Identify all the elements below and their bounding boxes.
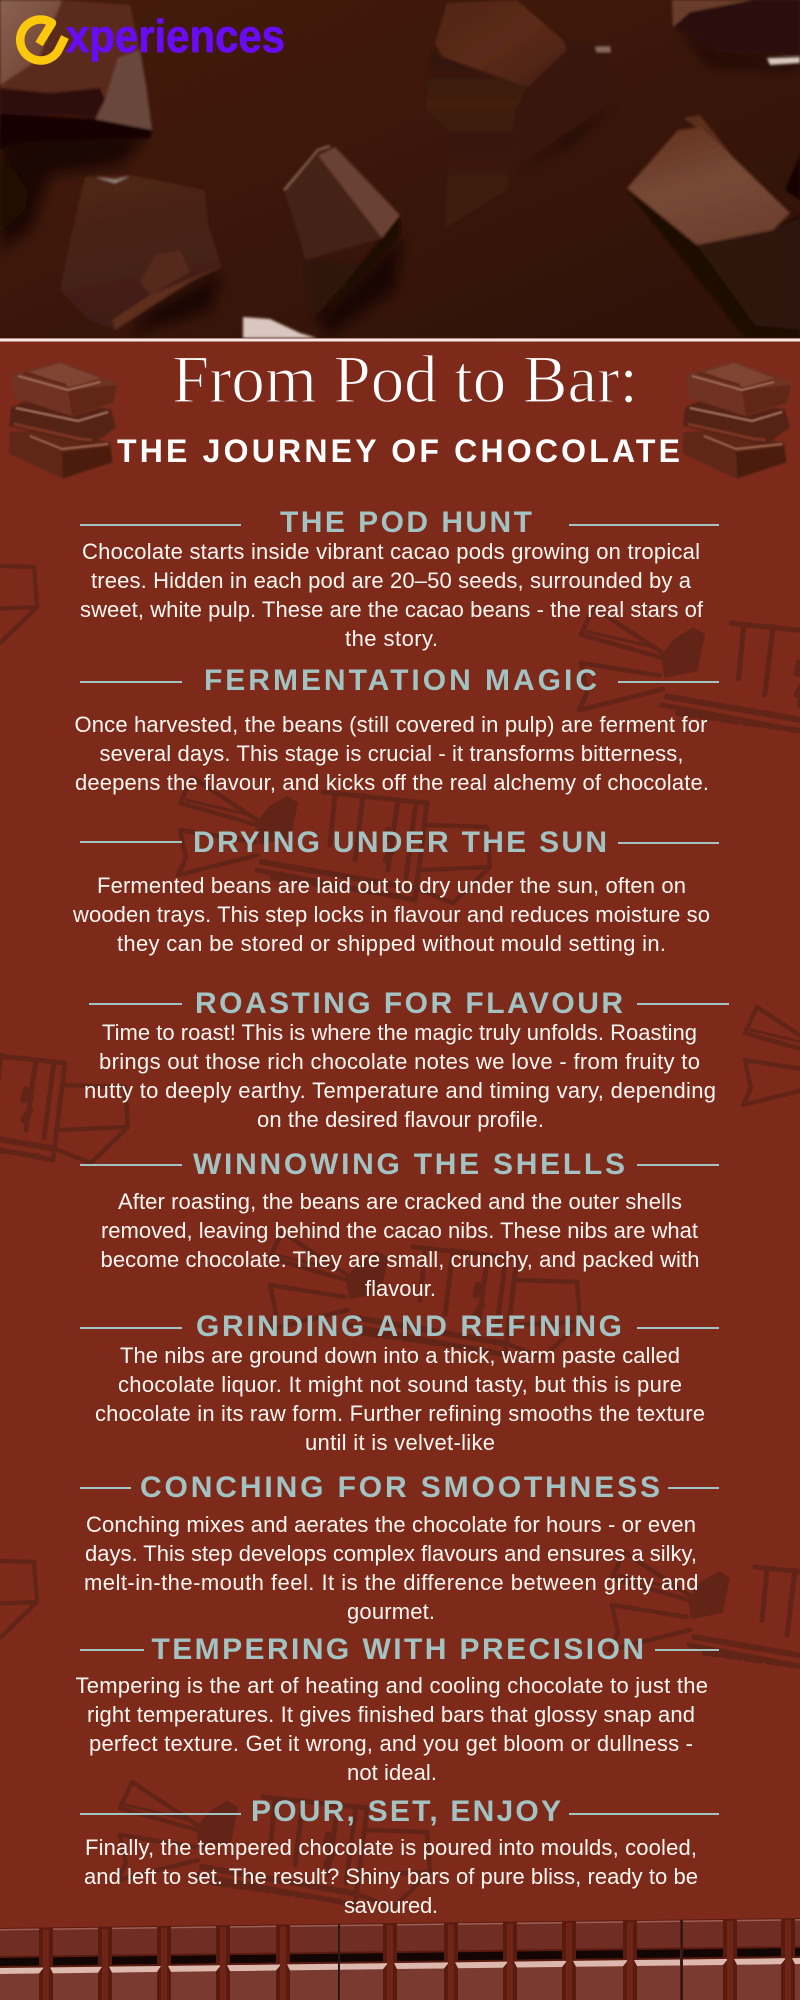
body text: sweet, white pulp. These are the cacao beans - the real stars of — [80, 597, 704, 622]
body text — [72, 873, 710, 956]
body text: deepens the flavour, and kicks off the real alchemy of chocolate. — [75, 770, 709, 795]
icon: chocolate stack left — [10, 362, 117, 478]
heading: WINNOWING THE SHELLS — [193, 1148, 625, 1181]
body text: Finally, the tempered chocolate is poured into moulds, cooled, — [85, 1835, 697, 1860]
divider lines — [80, 1813, 719, 1815]
body text: chocolate in its raw form. Further refining smooths the texture — [95, 1401, 705, 1426]
body text: on the desired flavour profile. — [257, 1107, 544, 1132]
icon: chocolate stack right — [684, 362, 791, 478]
section: roasting for flavour — [84, 987, 729, 1132]
body text: Tempering is the art of heating and cooling chocolate to just the — [76, 1673, 708, 1698]
heading: POUR, SET, ENJOY — [251, 1795, 561, 1828]
body text: Once harvested, the beans (still covered in pulp) are ferment for — [74, 712, 708, 737]
watermark candies — [0, 517, 800, 1908]
section: fermentation magic — [74, 664, 719, 795]
body text: chocolate liquor. It might not sound tasty, but this is pure — [118, 1372, 682, 1397]
section: tempering with precision — [76, 1633, 719, 1785]
body text — [100, 1189, 700, 1301]
body text: perfect texture. Get it wrong, and you get bloom or dullness - — [89, 1731, 693, 1756]
body text — [84, 1020, 716, 1132]
body text — [95, 1343, 705, 1455]
body text: After roasting, the beans are cracked and the outer shells — [118, 1189, 682, 1214]
divider lines — [80, 841, 719, 844]
body text: Fermented beans are laid out to dry under the sun, often on — [97, 873, 686, 898]
body text — [74, 712, 709, 795]
divider lines — [80, 524, 719, 526]
body text: right temperatures. It gives finished bars that glossy snap and — [87, 1702, 695, 1727]
cream drip — [243, 317, 317, 338]
chunk E — [673, 0, 800, 55]
body text — [84, 1835, 698, 1918]
chunk B — [60, 175, 222, 330]
body text — [80, 539, 704, 651]
body text: trees. Hidden in each pod are 20–50 seeds, surrounded by a — [91, 568, 692, 593]
divider lines — [80, 1487, 719, 1489]
heading: THE POD HUNT — [280, 506, 532, 539]
chunk C — [284, 155, 382, 260]
section: conching for smoothness — [80, 1471, 719, 1624]
body text: nutty to deeply earthy. Temperature and timing vary, depending — [84, 1078, 716, 1103]
body text: savoured. — [344, 1893, 438, 1918]
body text: days. This step develops complex flavours and ensures a silky, — [85, 1541, 697, 1566]
chunk D — [507, 40, 613, 190]
body text: not ideal. — [347, 1760, 437, 1785]
body text: melt-in-the-mouth feel. It is the difference between gritty and — [84, 1570, 698, 1595]
body text: several days. This stage is crucial - it transforms bitterness, — [100, 741, 684, 766]
section: grinding and refining — [80, 1310, 719, 1455]
section: pour, set, enjoy — [80, 1795, 719, 1918]
body text: removed, leaving behind the cacao nibs. These nibs are what — [101, 1218, 698, 1243]
hero photo: chocolate chunks — [0, 0, 800, 338]
section: drying under the sun — [72, 826, 719, 956]
body text: gourmet. — [347, 1599, 435, 1624]
title: From Pod to Bar: — [172, 341, 638, 417]
body text: and left to set. The result? Shiny bars of pure bliss, ready to be — [84, 1864, 698, 1889]
body text: brings out those rich chocolate notes we love - from fruity to — [99, 1049, 700, 1074]
heading: DRYING UNDER THE SUN — [193, 826, 607, 859]
section: winnowing the shells — [80, 1148, 719, 1301]
heading: GRINDING AND REFINING — [196, 1310, 622, 1343]
logo: experiences — [20, 10, 285, 62]
icon: yellow e mark — [20, 19, 65, 60]
body text — [84, 1512, 698, 1624]
divider lines — [80, 681, 719, 683]
logo wordmark: xperiences — [66, 10, 285, 62]
section: the pod hunt — [80, 506, 719, 651]
subtitle: THE JOURNEY OF CHOCOLATE — [117, 433, 680, 469]
body text — [76, 1673, 708, 1785]
heading: FERMENTATION MAGIC — [204, 664, 597, 697]
divider lines — [80, 1327, 719, 1329]
body text: Chocolate starts inside vibrant cacao pods growing on tropical — [82, 539, 700, 564]
body text: Conching mixes and aerates the chocolate for hours - or even — [86, 1512, 696, 1537]
body text: until it is velvet-like — [305, 1430, 495, 1455]
white divider — [0, 338, 800, 342]
heading: ROASTING FOR FLAVOUR — [195, 987, 623, 1020]
body text: The nibs are ground down into a thick, warm paste called — [120, 1343, 680, 1368]
body text: flavour. — [365, 1276, 436, 1301]
body text: they can be stored or shipped without mould setting in. — [117, 931, 666, 956]
divider lines — [80, 1164, 719, 1166]
chunk top-left — [0, 0, 62, 85]
body text: become chocolate. They are small, crunchy, and packed with — [100, 1247, 700, 1272]
footer: chocolate bar strip — [0, 1918, 800, 2000]
body text: Time to roast! This is where the magic truly unfolds. Roasting — [102, 1020, 697, 1045]
heading: CONCHING FOR SMOOTHNESS — [140, 1471, 660, 1504]
divider lines — [89, 1003, 729, 1005]
body text: the story. — [345, 626, 438, 651]
heading: TEMPERING WITH PRECISION — [152, 1633, 644, 1666]
chunk F — [627, 190, 800, 338]
divider lines — [80, 1649, 719, 1651]
body text: wooden trays. This step locks in flavour and reduces moisture so — [72, 902, 710, 927]
